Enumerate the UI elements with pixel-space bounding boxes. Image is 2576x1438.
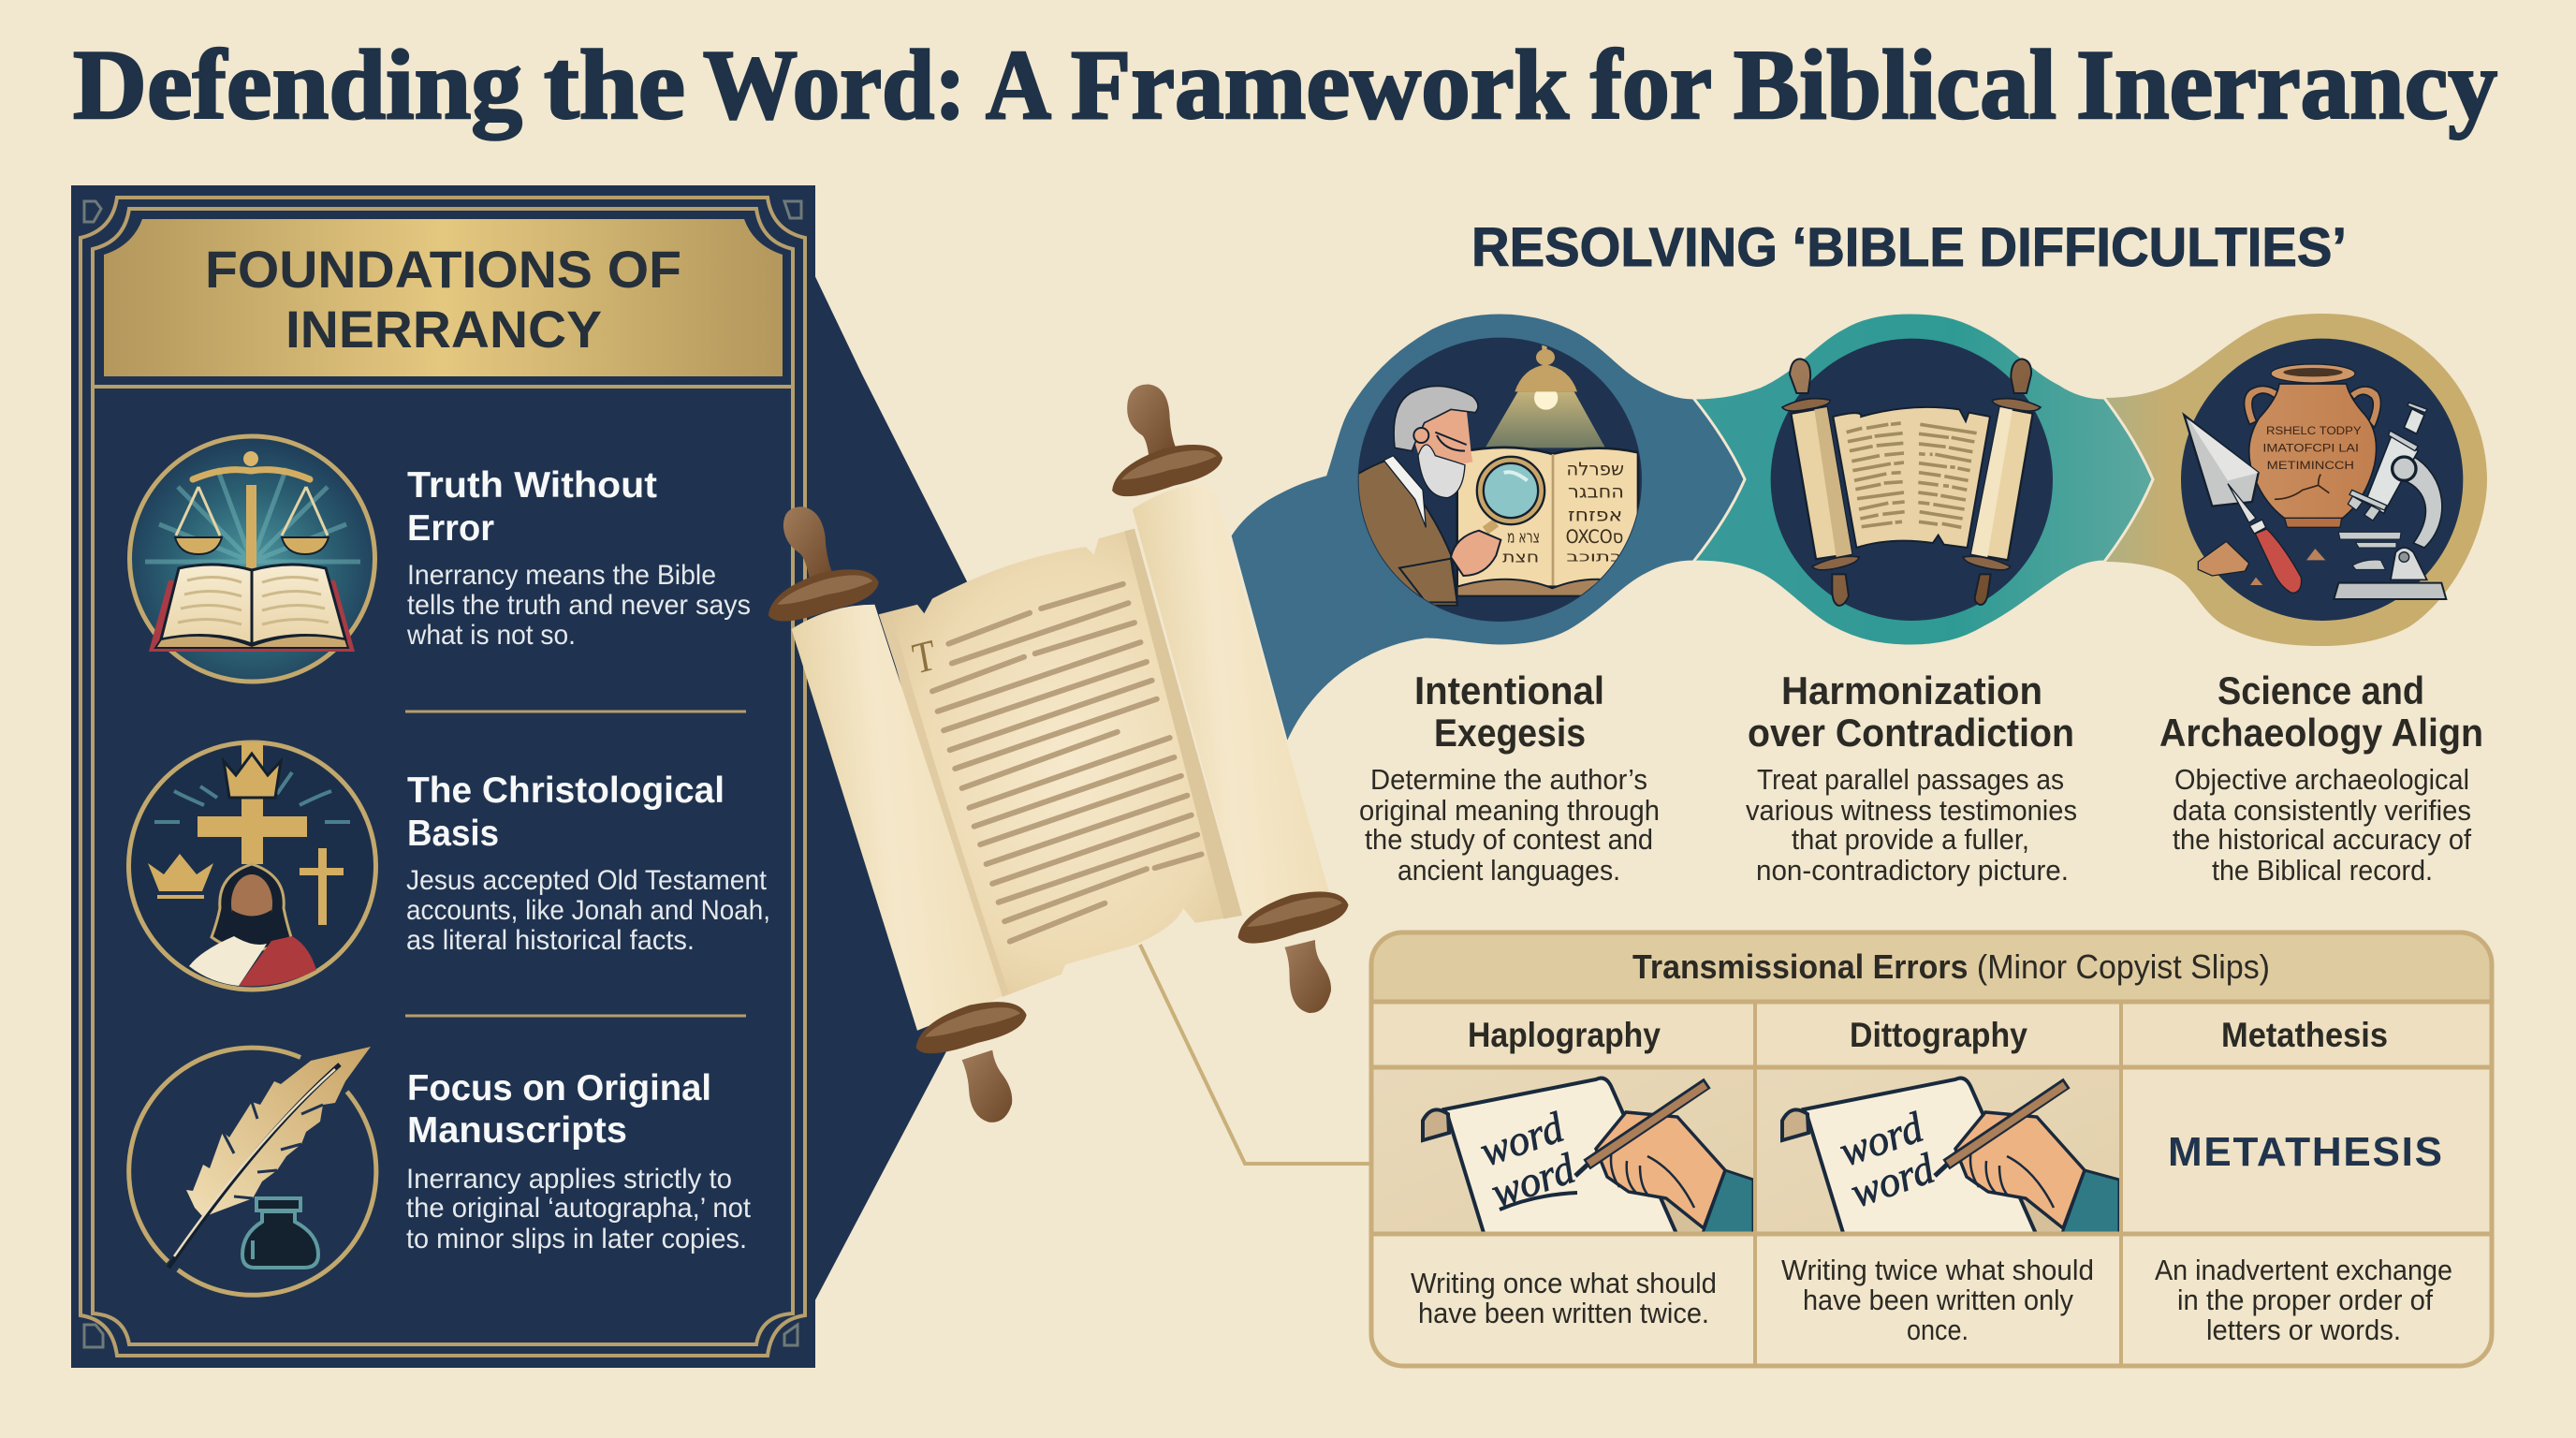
illustration: haplography hand: word xyxy=(1486,1144,1581,1216)
column: metathesis: Metathesis xyxy=(2221,1016,2388,1054)
title: Biblical xyxy=(1734,30,2056,139)
caption: science and archaeology align xyxy=(2159,668,2483,887)
icon: vase, trowel and microscope: RSHELC TODPY xyxy=(2266,424,2362,437)
caption: harmonization over contradiction: Harmonization xyxy=(1781,668,2042,712)
illustration: haplography hand: word xyxy=(1474,1103,1570,1175)
caption: intentional exegesis: Intentional xyxy=(1414,668,1604,712)
title xyxy=(73,30,2497,139)
column: metathesis: in the proper order of xyxy=(2177,1284,2433,1316)
icon: cross, crown and Christ xyxy=(129,742,376,990)
caption: harmonization over contradiction: various witness testimonies xyxy=(1746,794,2077,827)
column: dittography xyxy=(1781,1016,2094,1346)
table grid lines xyxy=(1373,1002,2490,1234)
illustration: dittography hand: word xyxy=(1845,1144,1940,1216)
left roller xyxy=(792,605,1003,1031)
caption: intentional exegesis: the study of contest and xyxy=(1365,823,1653,856)
connector from scroll to table xyxy=(1140,945,1371,1164)
text: the christological basis: accounts, like Jonah and Noah, xyxy=(406,895,770,926)
icon: vase, trowel and microscope: METIMINCCH xyxy=(2267,459,2354,472)
icon: scholar with magnifier: OXCOס xyxy=(1566,526,1623,548)
panel: foundations of inerrancy xyxy=(71,185,815,1368)
text: focus on original manuscripts: Manuscripts xyxy=(407,1110,627,1151)
icon: scholar with magnifier: אפזחז xyxy=(1568,505,1622,526)
table header: Transmissional Errors (Minor Copyist Slips) xyxy=(1632,947,2270,986)
caption: science and archaeology align: Science and xyxy=(2217,668,2424,712)
column: metathesis: METATHESIS xyxy=(2168,1129,2442,1175)
caption: science and archaeology align: Objective archaeological xyxy=(2174,763,2469,796)
heading banner xyxy=(104,219,783,376)
text: the christological basis: The Christological xyxy=(407,770,724,811)
icon: open scroll xyxy=(1771,339,2053,621)
column: dittography: once. xyxy=(1907,1313,1969,1346)
text: truth without error: Error xyxy=(407,508,494,549)
illustration: dittography hand: word xyxy=(1834,1103,1929,1175)
table: transmissional errors xyxy=(1371,932,2492,1366)
title: Defending xyxy=(73,30,522,139)
icon: scholar with magnifier: צרא מ xyxy=(1507,527,1540,547)
text: the christological basis: as literal historical facts. xyxy=(406,925,695,956)
title: Framework xyxy=(1071,30,1569,139)
caption: science and archaeology align: Archaeology Align xyxy=(2159,711,2483,755)
column: dittography: Writing twice what should xyxy=(1781,1254,2094,1286)
table body xyxy=(1371,932,2492,1366)
first letter: T xyxy=(909,630,939,684)
navy wedge connecting panel to scroll xyxy=(810,265,1006,1311)
caption: harmonization over contradiction: that provide a fuller, xyxy=(1792,823,2029,856)
illustration: dittography hand xyxy=(1782,1078,2119,1236)
ribbon: three connected medallions xyxy=(1230,313,2487,744)
column: haplography: have been written twice. xyxy=(1418,1297,1709,1329)
caption: intentional exegesis: original meaning through xyxy=(1359,794,1660,827)
text: focus on original manuscripts xyxy=(406,1068,752,1255)
text: focus on original manuscripts: Inerrancy applies strictly to xyxy=(406,1164,732,1195)
title: Inerrancy xyxy=(2076,30,2497,139)
heading: resolving bible difficulties: RESOLVING ‘BIBLE DIFFICULTIES’ xyxy=(1471,217,2347,278)
caption: intentional exegesis: Exegesis xyxy=(1434,711,1586,755)
caption: intentional exegesis: ancient languages. xyxy=(1398,854,1620,887)
text: focus on original manuscripts: the original ‘autographa,’ not xyxy=(406,1193,752,1224)
text: truth without error: Truth Without xyxy=(407,465,657,506)
column: metathesis xyxy=(2155,1016,2452,1346)
icon: quill and ink xyxy=(129,1047,376,1295)
icon: scholar with magnifier: חצת xyxy=(1502,549,1539,566)
text: truth without error: what is not so. xyxy=(406,620,576,651)
text: truth without error: Inerrancy means the Bible xyxy=(407,560,716,591)
wooden handles xyxy=(768,384,1349,1123)
text: the christological basis: Jesus accepted Old Testament xyxy=(406,865,768,896)
icon: vase, trowel and microscope: IMATOFCPI LAI xyxy=(2262,442,2359,455)
icon: vase, trowel and microscope xyxy=(2181,339,2463,621)
icon: scholar with magnifier: שפרלה xyxy=(1566,458,1624,479)
title: for xyxy=(1590,30,1712,139)
caption: intentional exegesis: Determine the author’s xyxy=(1370,763,1647,796)
caption: intentional exegesis xyxy=(1359,668,1660,887)
scroll text lines xyxy=(932,584,1202,942)
icon: scholar with magnifier: החבגר xyxy=(1568,481,1624,503)
text: focus on original manuscripts: to minor slips in later copies. xyxy=(406,1224,747,1255)
caption: harmonization over contradiction: non-contradictory picture. xyxy=(1756,854,2069,887)
text: the christological basis xyxy=(406,770,770,956)
column: haplography xyxy=(1411,1016,1717,1329)
title: Word: xyxy=(703,30,966,139)
caption: science and archaeology align: data consistently verifies xyxy=(2173,794,2471,827)
title: A xyxy=(986,30,1051,139)
caption: harmonization over contradiction xyxy=(1746,668,2077,887)
panel background xyxy=(71,185,815,1368)
caption: harmonization over contradiction: Treat parallel passages as xyxy=(1757,763,2064,796)
heading banner: INERRANCY xyxy=(285,300,602,359)
icon: scales and open book xyxy=(129,436,374,682)
icon: scholar with magnifier xyxy=(1357,328,1642,622)
column: haplography: Writing once what should xyxy=(1411,1267,1717,1299)
column: dittography: Dittography xyxy=(1850,1016,2027,1054)
caption: science and archaeology align: the Biblical record. xyxy=(2212,854,2433,887)
caption: science and archaeology align: the historical accuracy of xyxy=(2173,823,2471,856)
caption: harmonization over contradiction: over Contradiction xyxy=(1748,711,2074,755)
illustration: haplography hand xyxy=(1423,1078,1753,1236)
column: metathesis: letters or words. xyxy=(2206,1313,2401,1346)
title: the xyxy=(544,30,685,139)
text: the christological basis: Basis xyxy=(407,814,499,854)
scroll sheet xyxy=(879,529,1242,996)
heading banner: FOUNDATIONS OF xyxy=(205,240,681,299)
text: truth without error: tells the truth and never says xyxy=(407,590,751,621)
column: dittography: have been written only xyxy=(1803,1284,2073,1316)
icon: scholar with magnifier: בתוכב xyxy=(1566,549,1622,565)
column: metathesis: An inadvertent exchange xyxy=(2155,1254,2452,1286)
text: truth without error xyxy=(406,465,751,651)
central scroll xyxy=(768,384,1349,1123)
text: focus on original manuscripts: Focus on Original xyxy=(407,1068,711,1108)
column: haplography: Haplography xyxy=(1468,1016,1661,1054)
right roller xyxy=(1133,485,1330,916)
